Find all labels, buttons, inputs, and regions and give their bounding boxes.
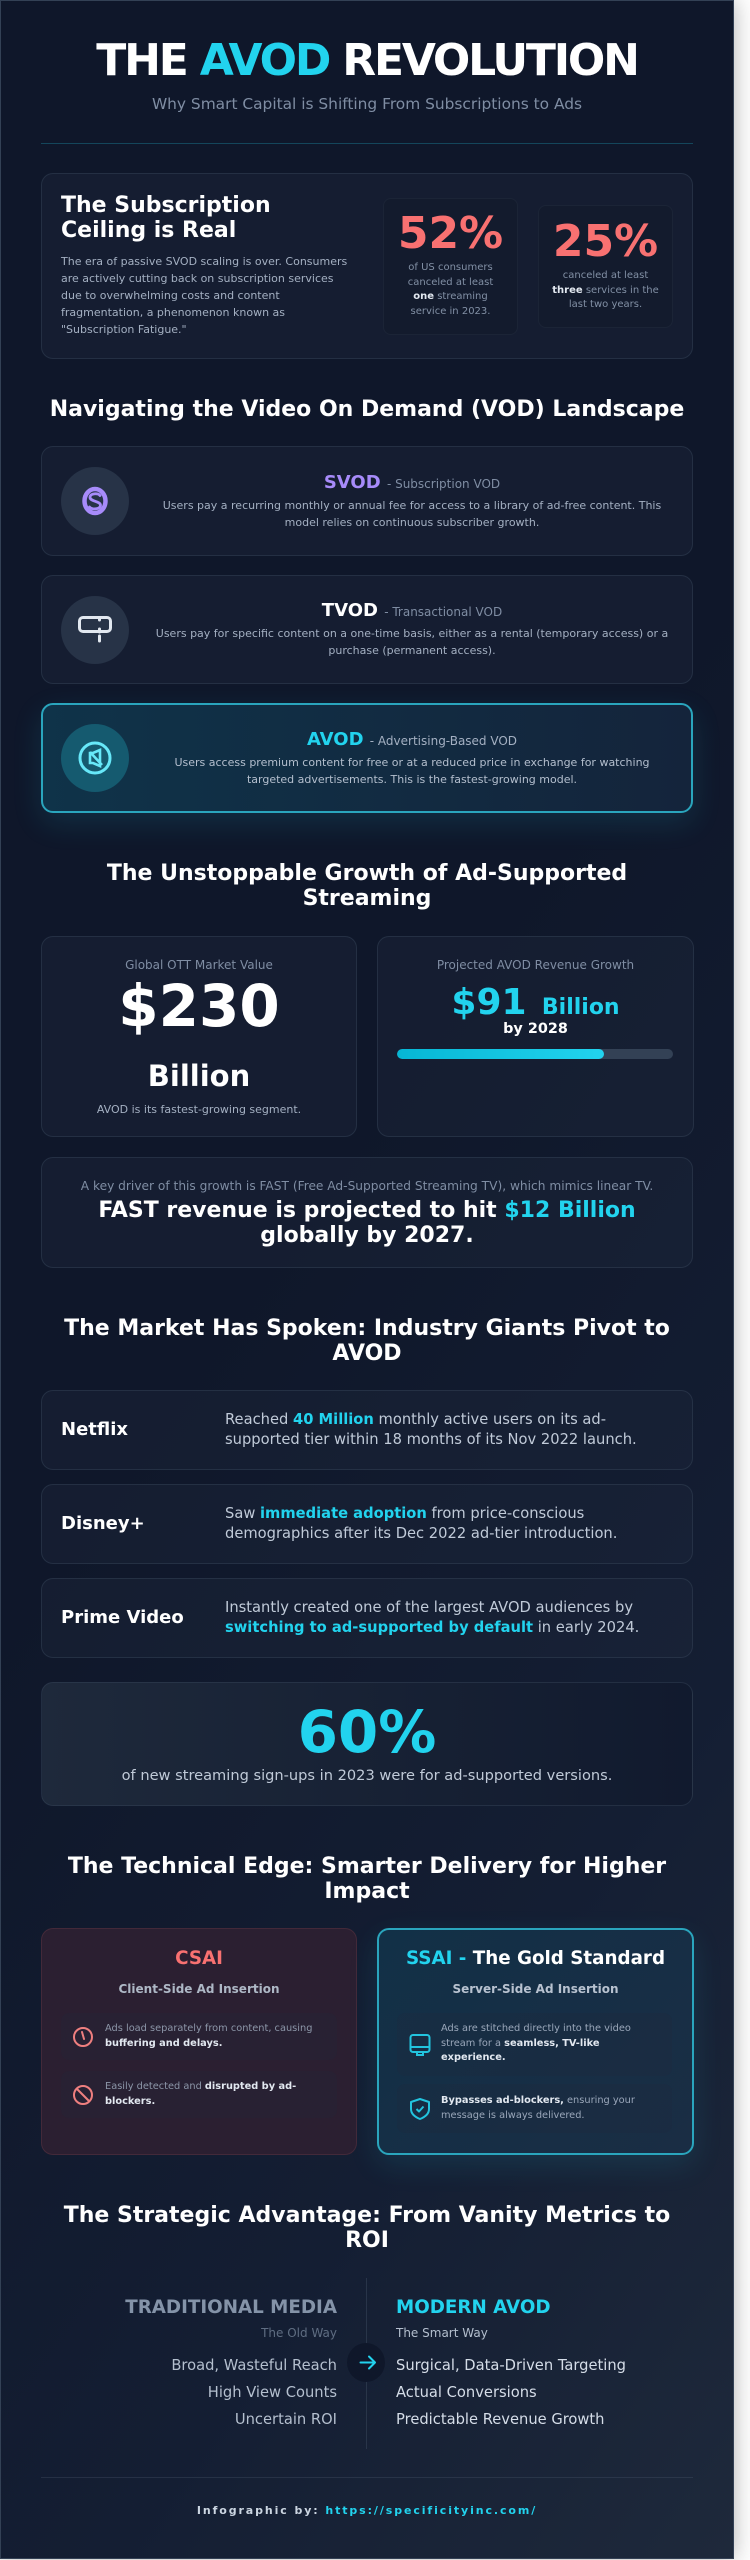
text: Disney+: Saw immediate adoption from price-conscious xyxy=(225,1505,584,1522)
heading: technical edge: Impact xyxy=(324,1878,410,1904)
paragraph: subscription fatigue xyxy=(60,255,347,336)
text: Disney+ xyxy=(225,1505,617,1542)
label: AVOD revenue: Projected AVOD Revenue Growth xyxy=(437,958,634,972)
text: Disney+: demographics after its Dec 2022 ad-tier introduction. xyxy=(225,1525,617,1542)
stat: 52 percent: service in 2023. xyxy=(411,306,490,317)
heading: market: AVOD xyxy=(332,1340,402,1366)
heading: CSAI: CSAI xyxy=(175,1948,223,1969)
description: SVOD: model relies on continuous subscriber growth. xyxy=(285,516,539,529)
stat: 52 percent: canceled at least xyxy=(408,277,493,288)
description: SVOD xyxy=(163,499,661,529)
heading: growth xyxy=(106,861,627,910)
heading: growth: The Unstoppable Growth of Ad-Supported xyxy=(107,861,627,886)
stat: 52 percent xyxy=(383,198,518,335)
heading: market: The Market Has Spoken: Industry Giants Pivot to xyxy=(64,1316,670,1341)
description: SVOD: Users pay a recurring monthly or annual fee for access to a library of ad-free content. This xyxy=(163,499,661,512)
text: seamless: stream for a seamless, TV-like xyxy=(441,2038,599,2049)
item: buffering xyxy=(61,2013,337,2060)
name: Prime Video: Prime Video xyxy=(61,1607,184,1628)
description: AVOD xyxy=(174,756,650,786)
list: traditional: High View Counts xyxy=(208,2384,337,2401)
list: modern xyxy=(396,2357,626,2428)
footer: Infographic by: https://specificityinc.com/ xyxy=(197,2504,537,2517)
text: buffering: buffering and delays. xyxy=(105,2038,222,2049)
heading: strategic advantage: The Strategic Advantage: From Vanity Metrics to xyxy=(64,2203,670,2228)
heading: VOD landscape: Navigating the Video On Demand (VOD) Landscape xyxy=(50,397,684,422)
text: bypass: Bypasses ad-blockers, ensuring your xyxy=(441,2095,635,2106)
text: buffering: Ads load separately from content, causing xyxy=(105,2023,312,2034)
heading: subscription ceiling: The Subscription xyxy=(61,193,271,218)
footer divider xyxy=(41,2477,693,2478)
text: FAST revenue: globally by 2027. xyxy=(260,1222,474,1248)
heading: subscription ceiling: Ceiling is Real xyxy=(61,218,236,242)
text: FAST driver: A key driver of this growth is FAST (Free Ad-Supported Streaming TV), which mimics linear TV. xyxy=(81,1179,653,1193)
stat: 25 percent: three services in the xyxy=(552,285,659,296)
item: seamless xyxy=(397,2013,672,2076)
title: THE AVOD REVOLUTION xyxy=(96,35,638,86)
stat: 25 percent: last two years. xyxy=(569,299,642,310)
value: 60 percent: 60% xyxy=(298,1698,436,1766)
list: modern: Predictable Revenue Growth xyxy=(396,2411,604,2428)
icon: shield xyxy=(410,2098,430,2120)
list: traditional xyxy=(171,2357,337,2428)
stat: 25 percent: 25% xyxy=(553,216,658,267)
heading: strategic advantage: ROI xyxy=(345,2228,389,2252)
text: seamless xyxy=(441,2023,631,2063)
name: Disney+: Disney+ xyxy=(61,1513,145,1534)
text: sign-ups: of new streaming sign-ups in 2023 were for ad-supported versions. xyxy=(122,1767,612,1784)
panel: 60 percent xyxy=(41,1682,693,1806)
list: modern: Actual Conversions xyxy=(396,2384,537,2401)
text: ad-blockers: blockers. xyxy=(105,2096,155,2107)
description: TVOD xyxy=(156,627,668,657)
paragraph: subscription fatigue: The era of passive SVOD scaling is over. Consumers xyxy=(61,255,347,268)
text: ad-blockers xyxy=(105,2081,296,2107)
panel: Disney+ xyxy=(41,1484,693,1564)
text: AVOD: AVOD - Advertising-Based VOD xyxy=(307,729,517,750)
center divider xyxy=(366,2278,367,2449)
list: traditional: Broad, Wasteful Reach xyxy=(171,2357,337,2374)
icon: arrow xyxy=(347,2343,385,2382)
description: AVOD: targeted advertisements. This is the fastest-growing model. xyxy=(247,773,577,786)
description: TVOD: Users pay for specific content on a one-time basis, either as a rental (temporary access) or a xyxy=(156,627,668,640)
stat: 52 percent: of US consumers xyxy=(408,262,493,273)
icon: prohibited xyxy=(73,2085,93,2105)
text: Prime Video: Instantly created one of the largest AVOD audiences by xyxy=(225,1599,633,1616)
panel: AVOD revenue xyxy=(377,936,694,1137)
value unit: Billion: Billion xyxy=(148,1059,250,1093)
text: Prime Video xyxy=(225,1599,639,1636)
list: modern: Surgical, Data-Driven Targeting xyxy=(396,2357,626,2374)
subheading: SSAI: Server-Side Ad Insertion xyxy=(452,1982,619,1996)
heading: subscription ceiling xyxy=(61,193,271,242)
list: traditional: Uncertain ROI xyxy=(235,2411,337,2428)
paragraph: subscription fatigue: due to overwhelming costs and content xyxy=(61,289,280,302)
text: Netflix: Reached 40 Million monthly active users on its ad- xyxy=(225,1411,606,1428)
value note: by 2028: by 2028 xyxy=(503,1021,568,1037)
heading: strategic advantage xyxy=(64,2203,670,2252)
icon: AVOD xyxy=(61,724,129,792)
panel: FAST xyxy=(41,1157,693,1268)
label: OTT: Global OTT Market Value xyxy=(125,958,273,972)
panel: Netflix xyxy=(41,1390,693,1470)
column: modern AVOD xyxy=(396,2297,626,2428)
name: Netflix: Netflix xyxy=(61,1419,128,1440)
progress bar xyxy=(397,1049,673,1059)
heading: technical edge: The Technical Edge: Smarter Delivery for Higher xyxy=(68,1854,666,1879)
text: FAST revenue: FAST revenue is projected to hit $12 Billion xyxy=(98,1198,636,1223)
paragraph: subscription fatigue: "Subscription Fatigue." xyxy=(61,323,187,336)
text: Prime Video: switching to ad-supported by default in early 2024. xyxy=(225,1619,639,1636)
text: ad-blockers: Easily detected and disrupted by ad- xyxy=(105,2081,296,2092)
text: buffering xyxy=(105,2023,312,2049)
text: Netflix xyxy=(225,1411,637,1448)
stat: 25 percent xyxy=(538,205,673,328)
text: bypass xyxy=(441,2095,635,2121)
sub: smart way: The Smart Way xyxy=(396,2326,488,2340)
sub: old way: The Old Way xyxy=(261,2326,337,2340)
item: bypass xyxy=(397,2084,672,2133)
stat: 52 percent: 52% xyxy=(398,208,503,259)
description: AVOD: Users access premium content for free or at a reduced price in exchange for watching xyxy=(174,756,650,769)
value: 91 billion: $91 Billion xyxy=(451,982,620,1023)
icon: monitor xyxy=(410,2034,430,2056)
description: TVOD: purchase (permanent access). xyxy=(328,644,496,657)
header divider xyxy=(41,143,693,144)
stat: 25 percent: canceled at least xyxy=(563,270,648,281)
icon: TVOD xyxy=(61,596,129,664)
panel: AVOD xyxy=(41,703,693,813)
subheading: CSAI: Client-Side Ad Insertion xyxy=(118,1982,280,1996)
panel: OTT market value xyxy=(41,936,357,1137)
heading: technical edge xyxy=(68,1854,666,1904)
heading: traditional media: TRADITIONAL MEDIA xyxy=(125,2297,337,2318)
text: bypass: message is always delivered. xyxy=(441,2110,585,2121)
text: FAST revenue xyxy=(98,1198,636,1248)
panel: SVOD xyxy=(41,446,693,556)
text: Netflix: supported tier within 18 months of its Nov 2022 launch. xyxy=(225,1431,637,1448)
heading: SSAI: SSAI - The Gold Standard xyxy=(406,1948,665,1969)
icon: clock xyxy=(73,2027,93,2047)
heading: modern AVOD: MODERN AVOD xyxy=(396,2297,551,2318)
panel: CSAI xyxy=(41,1928,357,2155)
heading: market xyxy=(64,1316,670,1366)
paragraph: subscription fatigue: are actively cutting back on subscription services xyxy=(61,272,334,285)
panel: subscription ceiling xyxy=(41,173,693,359)
value: 230: $230 xyxy=(118,972,280,1040)
item: ad-blockers xyxy=(61,2071,337,2118)
stat: 52 percent: one streaming xyxy=(413,291,488,302)
heading: growth: Streaming xyxy=(303,886,431,910)
panel: SSAI xyxy=(377,1928,694,2155)
paragraph: subscription fatigue: fragmentation, a phenomenon known as xyxy=(61,306,285,319)
icon: SVOD xyxy=(61,467,129,535)
subtitle: Why Smart Capital is Shifting From Subscriptions to Ads xyxy=(152,95,582,113)
text: SVOD: SVOD - Subscription VOD xyxy=(324,472,500,493)
text: seamless: experience. xyxy=(441,2052,506,2063)
text: seamless: Ads are stitched directly into the video xyxy=(441,2023,631,2034)
note: OTT: AVOD is its fastest-growing segment. xyxy=(97,1103,301,1116)
panel: TVOD xyxy=(41,575,693,684)
column: traditional media xyxy=(125,2297,337,2428)
text: TVOD: TVOD - Transactional VOD xyxy=(322,600,502,621)
panel: Prime Video xyxy=(41,1578,693,1658)
